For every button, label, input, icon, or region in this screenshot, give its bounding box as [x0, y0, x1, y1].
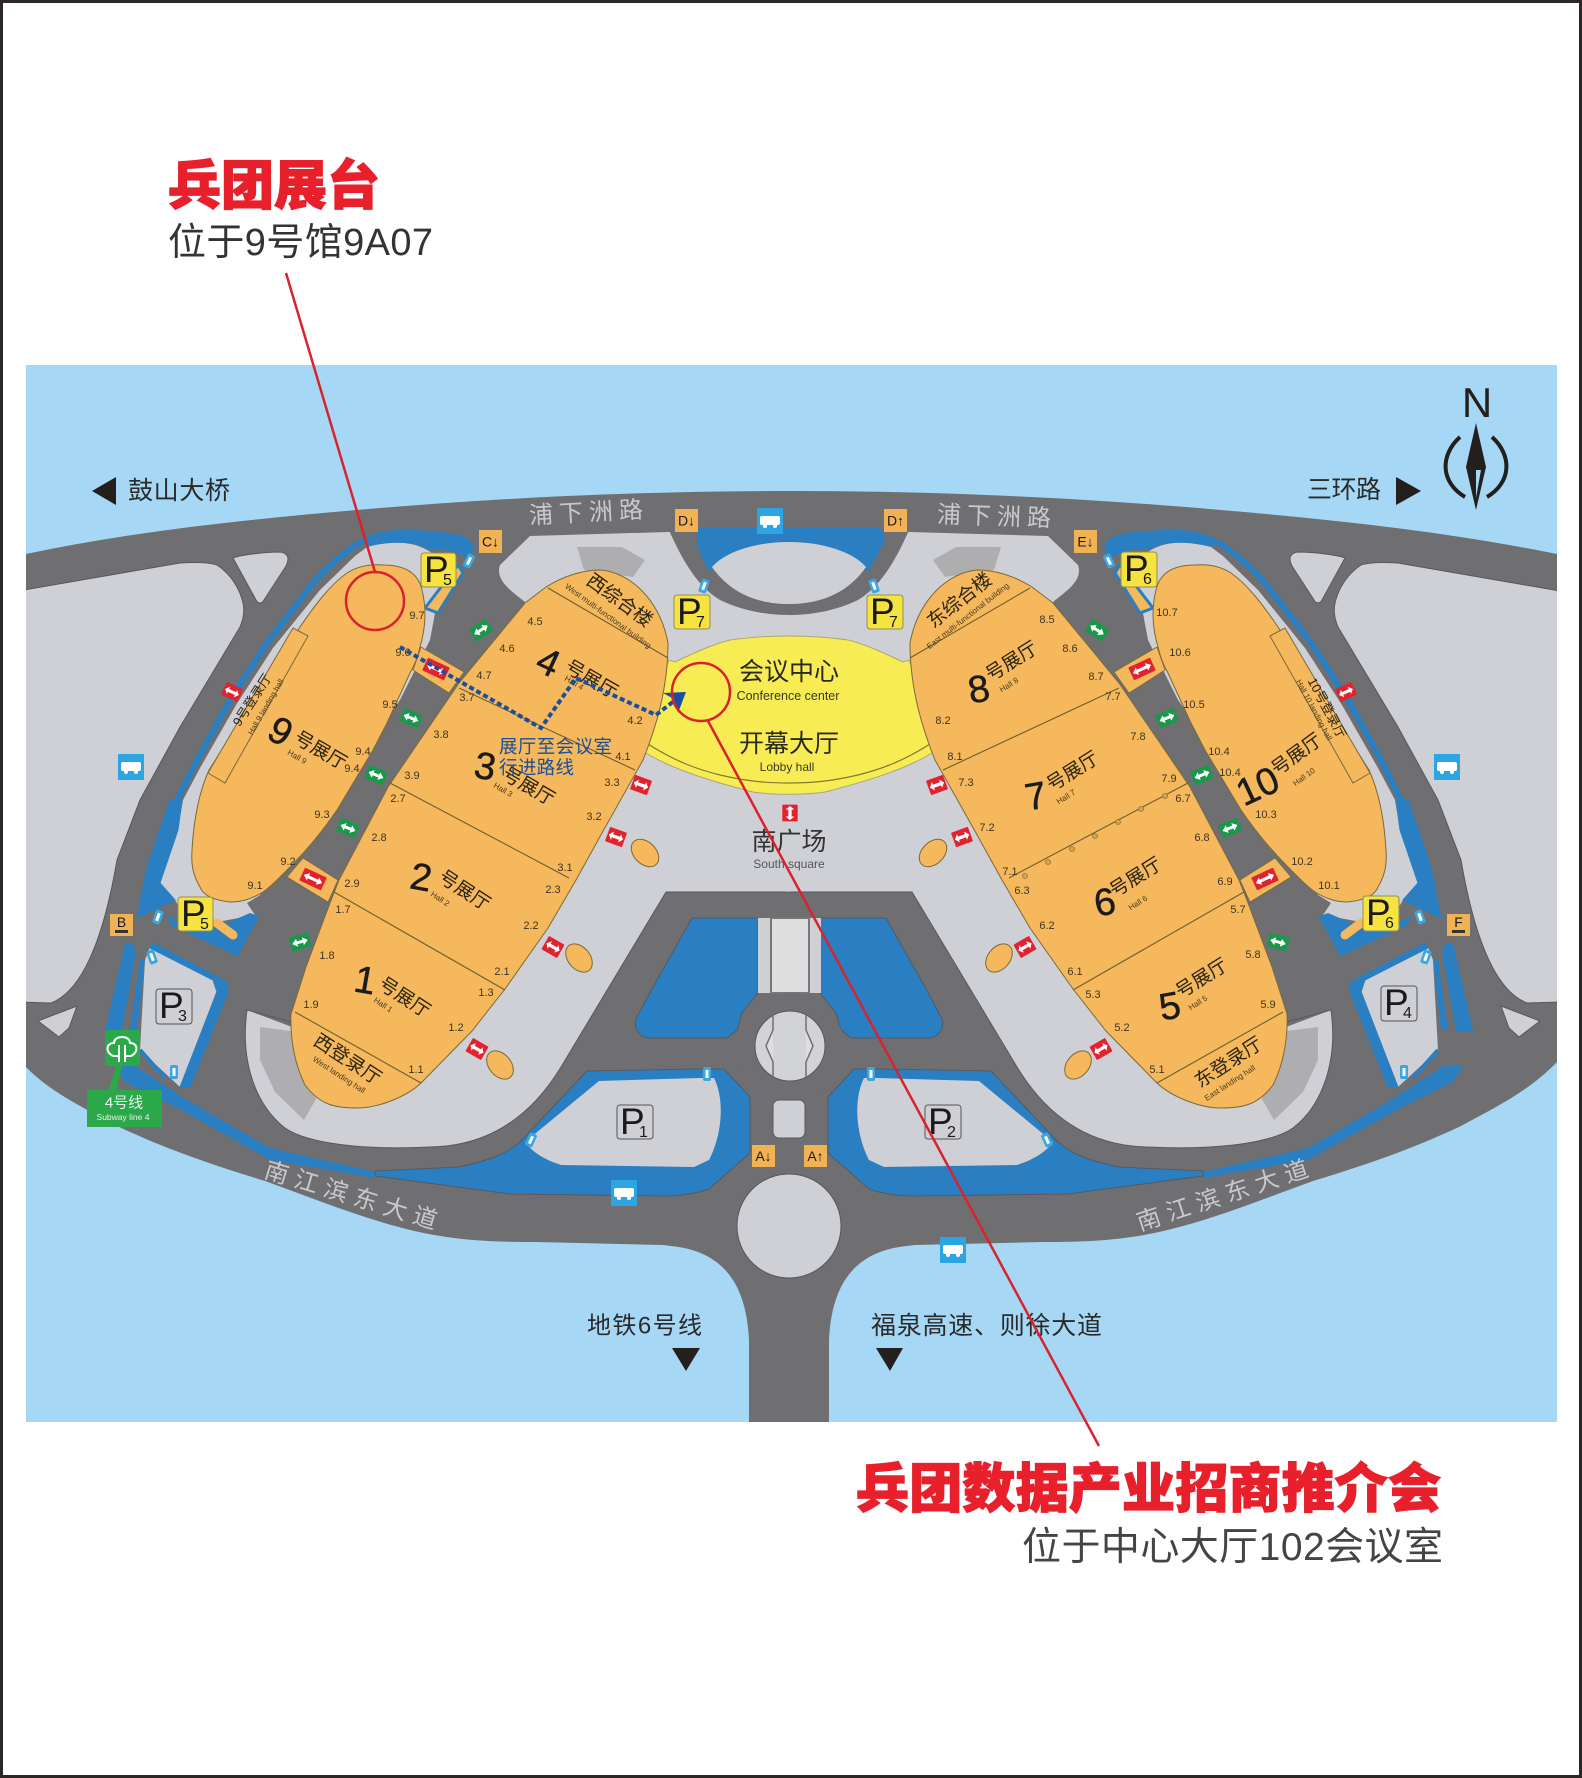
P5 south: 5 [200, 916, 209, 933]
booth numbers: 2.9 [344, 878, 360, 890]
gushan bridge: 鼓山大桥 [128, 477, 230, 505]
booth pointer line [286, 273, 375, 572]
hall 4 label: 4 [530, 640, 566, 686]
east building label: East multi-functional building [925, 581, 1011, 651]
booth numbers: 10.5 [1183, 699, 1205, 711]
booth numbers: 2.7 [390, 793, 406, 805]
booth numbers: 9.6 [395, 647, 411, 659]
hall 7 label: 7 [1022, 774, 1050, 820]
booth numbers: 8.2 [935, 715, 951, 727]
hall 6 label: Hall 6 [1127, 893, 1150, 912]
west ground: fields, ponds and car parks [18, 528, 790, 1196]
booth numbers: 2.1 [494, 966, 510, 978]
hall 1 label: 号展厅 [374, 974, 434, 1022]
booth title: 兵团展台 [168, 156, 380, 216]
booth numbers: 9.1 [247, 880, 263, 892]
third ring road [1307, 476, 1421, 505]
booth numbers: 3.8 [433, 729, 449, 741]
hall 10 label [1230, 730, 1326, 815]
booth numbers: 7.7 [1105, 691, 1121, 703]
hall dividers [295, 588, 668, 1083]
hall 9 lobby label: 9号登录厅 [230, 671, 274, 729]
booth numbers: 8.6 [1062, 643, 1078, 655]
centre red sign [782, 805, 798, 821]
hall 5 label [1156, 955, 1232, 1030]
lobby building [638, 636, 940, 794]
metro icon [105, 1030, 140, 1066]
lobby hall: Lobby hall [760, 760, 814, 774]
conference centre [737, 658, 839, 703]
callout: conference marker [672, 663, 1099, 1446]
gate D up [884, 509, 907, 532]
P4: 4 [1403, 1005, 1412, 1022]
gate B: B [117, 914, 126, 930]
booth numbers: 8.5 [1039, 614, 1055, 626]
gate D up: D↑ [887, 512, 904, 528]
nanjiang road east: 南江滨东大道 [1133, 1153, 1319, 1237]
booth numbers: 2.8 [371, 832, 387, 844]
hall 6 label: 号展厅 [1106, 854, 1166, 902]
roundabout centre [755, 1011, 825, 1081]
gate A up: A↑ [807, 1148, 824, 1164]
hall 5 label: Hall 5 [1187, 993, 1210, 1012]
P7 east [867, 591, 903, 632]
P3 [156, 985, 192, 1026]
compass needle and arcs [1446, 423, 1506, 510]
moat top bend [358, 530, 473, 558]
road names [261, 496, 1319, 1237]
booth numbers: 1.7 [335, 904, 351, 916]
P2 [925, 1101, 961, 1142]
gate F [1447, 914, 1470, 936]
hall 8 label: Hall 8 [998, 675, 1021, 694]
booth numbers: 10.3 [1255, 809, 1277, 821]
P6 north: 6 [1143, 571, 1152, 588]
booth numbers: 3.9 [404, 770, 420, 782]
P6 north [1121, 548, 1157, 589]
hall 7 label [1022, 748, 1103, 820]
gate B [110, 914, 133, 936]
hall 3 label: 号展厅 [498, 764, 558, 810]
centre structures [638, 527, 940, 1278]
booth numbers: 10.6 [1169, 647, 1191, 659]
hall 4 label: 号展厅 [561, 657, 621, 703]
hall 1 label: 1 [351, 958, 379, 1004]
booth numbers: 9.7 [409, 610, 425, 622]
booth numbers: 7.2 [979, 822, 995, 834]
west building label: West multi-functional building [563, 582, 653, 650]
P4 [1381, 982, 1417, 1023]
south pond [635, 918, 758, 1038]
road network [26, 491, 1557, 1422]
landing plazas [260, 547, 645, 1120]
booth numbers: 8.1 [947, 751, 963, 763]
heading: corps booth [168, 156, 433, 264]
route: hall to conference room [400, 647, 686, 778]
subway line 4 marker [87, 1030, 162, 1127]
hall 9 label: 9 [260, 709, 300, 755]
map panel water background [26, 365, 1557, 1422]
south square [751, 828, 827, 871]
booth numbers: 5.2 [1114, 1022, 1130, 1034]
P3: 3 [178, 1008, 187, 1025]
east halls and signs mirrored [867, 553, 1432, 1148]
booth numbers: 5.7 [1230, 904, 1246, 916]
P2: P [928, 1101, 953, 1142]
gate E [1074, 530, 1097, 553]
booth numbers: 6.3 [1014, 885, 1030, 897]
gate A up [804, 1145, 827, 1167]
hall 8 label: 号展厅 [982, 638, 1042, 686]
P1: 1 [639, 1124, 648, 1141]
metro pointer [108, 1066, 122, 1092]
heading: conference [856, 1460, 1443, 1569]
east landing hall label: 东登录厅 [1191, 1033, 1267, 1093]
small car park markers [146, 553, 711, 1148]
hall 3 label: 3 [471, 744, 499, 790]
hall 3 label: Hall 3 [492, 781, 515, 799]
booth numbers: 9.2 [280, 856, 296, 868]
hall 8 label: 8 [965, 667, 993, 713]
booth numbers: 6.7 [1175, 793, 1191, 805]
hall bridge north [413, 647, 464, 693]
P5 south: P [181, 893, 206, 934]
hall 5 label: 5 [1156, 984, 1184, 1030]
gate D down: D↓ [678, 512, 695, 528]
P3 lower moat [140, 1050, 165, 1078]
puxiazhou road east: 浦下洲路 [937, 501, 1057, 533]
booth numbers: 4.7 [476, 670, 492, 682]
P1: P [620, 1101, 645, 1142]
booth numbers: 4.1 [615, 751, 631, 763]
gate E: E↓ [1077, 534, 1094, 550]
hall 9 label: 号展厅 [290, 728, 350, 774]
booth numbers: 2.3 [545, 884, 561, 896]
east building label: 东综合楼 [923, 569, 996, 633]
booth numbers: 10.4 [1208, 746, 1230, 758]
booth numbers: 9.5 [382, 699, 398, 711]
east landing hall label: East landing hall [1203, 1063, 1257, 1103]
centre labels [737, 658, 839, 871]
metro label: 4号线 [105, 1094, 143, 1112]
lobby hall: 开幕大厅 [739, 730, 839, 758]
booth numbers: 5.3 [1085, 989, 1101, 1001]
booth numbers: 2.2 [523, 920, 539, 932]
direction labels [92, 476, 1421, 1371]
booth numbers: 3.1 [557, 862, 573, 874]
hall 1 label [351, 958, 434, 1022]
hall 9 landing strip [208, 628, 308, 783]
east ground mirrored [788, 528, 1560, 1196]
fuquan expressway: 福泉高速、则徐大道 [871, 1312, 1102, 1340]
P6 south [1363, 892, 1399, 933]
booth numbers: 9.4 [355, 746, 371, 758]
blue pond under P5 [168, 914, 258, 955]
hall 4 label: Hall 4 [563, 674, 586, 692]
small central island [773, 1100, 805, 1138]
south square edge [245, 892, 789, 1148]
hall 10 label: 10 [1230, 759, 1286, 815]
booth numbers: 1.2 [448, 1022, 464, 1034]
booth numbers: 6.1 [1067, 966, 1083, 978]
orange stairs blobs [481, 834, 664, 1084]
booth numbers: 3.3 [604, 777, 620, 789]
moat ribbon [176, 542, 360, 802]
booth numbers: 9.3 [314, 809, 330, 821]
conference title: 兵团数据产业招商推介会 [856, 1460, 1441, 1519]
hall 6 label [1091, 854, 1166, 926]
booth numbers: 7.1 [1002, 866, 1018, 878]
third ring road: 三环路 [1307, 476, 1381, 504]
puxiazhou road west: 浦下洲路 [528, 496, 650, 530]
gate A down [752, 1145, 775, 1167]
booth numbers: 4.5 [527, 616, 543, 628]
hall 10 lobby label: Hall 10 landing hall [1294, 678, 1334, 742]
P5 north: 5 [443, 572, 452, 589]
booth numbers: 6.2 [1039, 920, 1055, 932]
north arch road [668, 528, 910, 615]
west landing hall label: West landing hall [311, 1055, 367, 1095]
lobby divider [645, 742, 933, 783]
booth numbers: 6.9 [1217, 876, 1233, 888]
south circle [737, 1174, 841, 1278]
gate C [479, 530, 502, 553]
P3 moat [150, 943, 228, 1087]
moat lower bend [137, 800, 182, 918]
booth numbers: 6.8 [1194, 832, 1210, 844]
booth numbers: 7.8 [1130, 731, 1146, 743]
ground layer clipped to the map [18, 528, 1560, 1196]
P7 west: P [677, 591, 702, 632]
booth numbers [247, 607, 1340, 1076]
west landing hall label: 西登录厅 [309, 1030, 385, 1090]
roundabout ring [736, 993, 844, 1101]
booth numbers: 1.1 [408, 1064, 424, 1076]
hall 2 label: 号展厅 [434, 867, 494, 915]
booth numbers: 5.1 [1149, 1064, 1165, 1076]
conference pointer line [708, 721, 1099, 1446]
booth numbers: 10.1 [1318, 880, 1340, 892]
booth location: 位于9号馆9A07 [168, 222, 433, 264]
P5 north: P [424, 549, 449, 590]
hall 4 label [530, 640, 621, 703]
hall 10 label: 号展厅 [1268, 730, 1326, 780]
west outer moats [105, 943, 375, 1178]
hall 7 dots [1022, 794, 1168, 878]
halls 1 to 4 outline [291, 570, 668, 1108]
booth numbers: 9.4 [344, 763, 360, 775]
booth numbers: 7.9 [1161, 773, 1177, 785]
hall 2 label [407, 855, 494, 915]
north lens lawn [712, 542, 866, 604]
route label [499, 736, 612, 778]
hall 7 label: Hall 7 [1055, 787, 1078, 806]
north letter: N [1462, 379, 1492, 426]
P3: P [159, 985, 184, 1026]
gate C: C↓ [482, 534, 499, 550]
P1 [617, 1101, 653, 1142]
booth numbers: 10.2 [1291, 856, 1313, 868]
hall 7 label: 号展厅 [1043, 748, 1103, 796]
booth numbers: 3.7 [459, 692, 475, 704]
booth numbers: 1.8 [319, 950, 335, 962]
P7 east: P [870, 591, 895, 632]
P3 car park [140, 947, 217, 1087]
metro label: Subway line 4 [97, 1112, 150, 1122]
hall 5 label: 号展厅 [1172, 955, 1232, 1003]
compass [1446, 379, 1506, 510]
conference location: 位于中心大厅102会议室 [1022, 1526, 1443, 1569]
hall 10 label: Hall 10 [1291, 766, 1317, 788]
metro label [87, 1090, 162, 1127]
bus stop icons [118, 508, 1460, 1263]
booth numbers: 1.3 [478, 987, 494, 999]
hall labels [230, 569, 1349, 1103]
hall 9 label [260, 709, 350, 774]
booth numbers: 8.7 [1088, 671, 1104, 683]
red entrance signs [221, 658, 652, 1060]
north crescent water [697, 527, 884, 572]
P6 south: P [1366, 892, 1391, 933]
P7 west [674, 591, 710, 632]
P3 inner moat [130, 959, 145, 1030]
P7 west: 7 [696, 614, 705, 631]
roundabout inner plaza [766, 1015, 813, 1077]
booth numbers: 10.4 [1219, 767, 1241, 779]
central south square ground [245, 528, 790, 1148]
metro line 6: 地铁6号线 [587, 1312, 702, 1340]
booth numbers: 4.6 [499, 643, 515, 655]
fuquan expressway [871, 1312, 1102, 1371]
hall 2 label: Hall 2 [429, 890, 451, 909]
gate tags [110, 509, 1470, 1167]
P1 moat [375, 1069, 750, 1196]
south square: 南广场 [751, 828, 827, 856]
west halls and signs [146, 553, 711, 1148]
conference circle [672, 663, 730, 721]
nanjiang road west: 南江滨东大道 [261, 1157, 447, 1237]
hall 9 outline [192, 565, 425, 902]
hall 9 ground [160, 542, 445, 922]
booth numbers: 7.3 [958, 777, 974, 789]
route label: 行进路线 [499, 757, 574, 778]
gate D down [675, 509, 698, 532]
hall 2 label: 2 [407, 855, 435, 901]
booth numbers: 5.9 [1260, 999, 1276, 1011]
hall 10 lobby label: 10号登录厅 [1305, 675, 1349, 741]
booth numbers: 5.8 [1245, 949, 1261, 961]
green exit signs [289, 619, 493, 951]
hall 8 label [965, 638, 1042, 713]
conference centre: 会议中心 [739, 658, 839, 686]
route arrowhead [663, 692, 686, 713]
south square: South square [753, 857, 825, 871]
P6 north: P [1124, 548, 1149, 589]
hall 3 label [471, 744, 558, 810]
hall bridge south [287, 858, 338, 902]
P4: P [1384, 982, 1409, 1023]
outer field [18, 562, 244, 1003]
P2: 2 [947, 1124, 956, 1141]
booth numbers: 4.2 [627, 715, 643, 727]
hall 6 label: 6 [1091, 880, 1119, 926]
metro line 6 [587, 1312, 702, 1371]
booth numbers: 3.2 [586, 811, 602, 823]
conference centre: Conference center [737, 689, 839, 703]
callout: booth marker [286, 273, 404, 630]
axis walkway inner [771, 918, 809, 993]
hall 1 label: Hall 1 [372, 996, 394, 1015]
P1 car park [525, 1078, 721, 1167]
hall 9 label: Hall 9 [286, 748, 309, 766]
P6 south: 6 [1385, 915, 1394, 932]
axis walkway [758, 918, 821, 993]
P5 lower capsule [217, 923, 233, 935]
parking signs [156, 548, 1417, 1142]
dotted route [400, 647, 678, 728]
booth numbers: 10.7 [1156, 607, 1178, 619]
west building label: 西综合楼 [582, 569, 657, 632]
booth numbers: 1.9 [303, 999, 319, 1011]
gate A down: A↓ [755, 1148, 772, 1164]
hall 9 lobby label: Hall 9 landing hall [246, 677, 286, 737]
traffic islands [38, 552, 288, 1037]
lobby hall [739, 730, 839, 774]
P7 east: 7 [889, 614, 898, 631]
gate F: F [1454, 914, 1463, 930]
P5 capsule [425, 565, 463, 613]
route label: 展厅至会议室 [499, 736, 612, 757]
booth circle [346, 572, 404, 630]
